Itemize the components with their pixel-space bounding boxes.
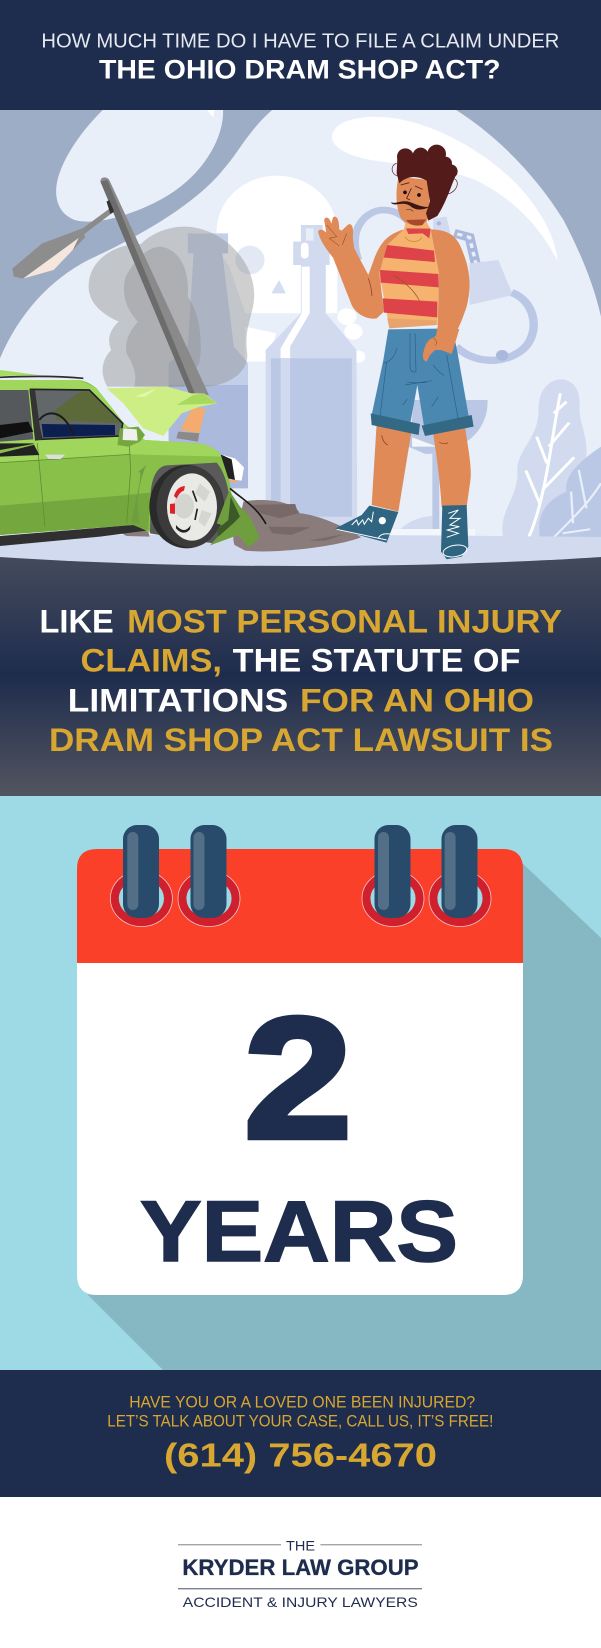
panel: calendar section [0,796,601,1370]
number 2: 2 [244,982,352,1174]
calendar shadow [88,860,601,1370]
statement text: FOR AN OHIO [300,682,534,718]
headlight [221,454,244,481]
man face [396,177,429,225]
skull [217,176,365,363]
label YEARS: YEARS [140,1184,458,1280]
panel: header [0,0,601,111]
man hand [319,218,353,258]
man torso and head [319,145,470,350]
mirror and handle [45,427,145,459]
statement text: MOST PERSONAL INJURY [127,604,563,640]
ground [0,535,601,566]
statement text: DRAM SHOP ACT LAWSUIT IS [49,722,553,758]
car hood [107,387,217,436]
calendar binder tabs [123,825,478,918]
calendar page [77,963,523,1295]
car [0,370,266,548]
statement text: LIKE [40,604,114,640]
man mustache [391,202,428,209]
man [319,145,474,559]
statement text [40,604,563,758]
front bumper debris [210,488,266,547]
calendar rings [110,870,491,926]
man shorts [371,328,474,436]
statement text: CLAIMS, [80,642,222,678]
scene backdrop [0,110,601,550]
car body [0,370,233,546]
panel: statement band [0,550,601,796]
oil puddle [119,500,361,551]
goblet [387,400,488,537]
logo name: KRYDER LAW GROUP [182,1555,419,1580]
illustration: crash scene [0,110,601,566]
calendar [77,825,523,1295]
man pocket hand [423,329,459,362]
calendar header [77,849,523,963]
handcuffs [355,210,534,361]
man arms [431,229,470,350]
heading line 2: THE OHIO DRAM SHOP ACT? [99,54,500,84]
street lamp [12,177,209,442]
statement text: THE STATUTE OF [233,642,520,678]
plants [502,379,601,542]
smoke [89,227,254,387]
panel: call to action [0,1370,601,1497]
logo the: THE [286,1538,315,1554]
call to action line 2: LET’S TALK ABOUT YOUR CASE, CALL US, IT’S FREE! [107,1412,493,1431]
man legs and shoes [335,423,471,559]
car windows [0,389,123,457]
phone number: (614) 756-4670 [164,1437,437,1474]
logo tagline: ACCIDENT & INJURY LAWYERS [183,1594,418,1610]
logo [178,1538,422,1610]
liquor bottles [169,225,357,530]
man hair [397,145,458,221]
statement text: LIMITATIONS [68,682,288,718]
heading line 1: HOW MUCH TIME DO I HAVE TO FILE A CLAIM UNDER [41,30,559,52]
wheel [149,463,230,548]
call to action line 1: HAVE YOU OR A LOVED ONE BEEN INJURED? [129,1393,475,1412]
